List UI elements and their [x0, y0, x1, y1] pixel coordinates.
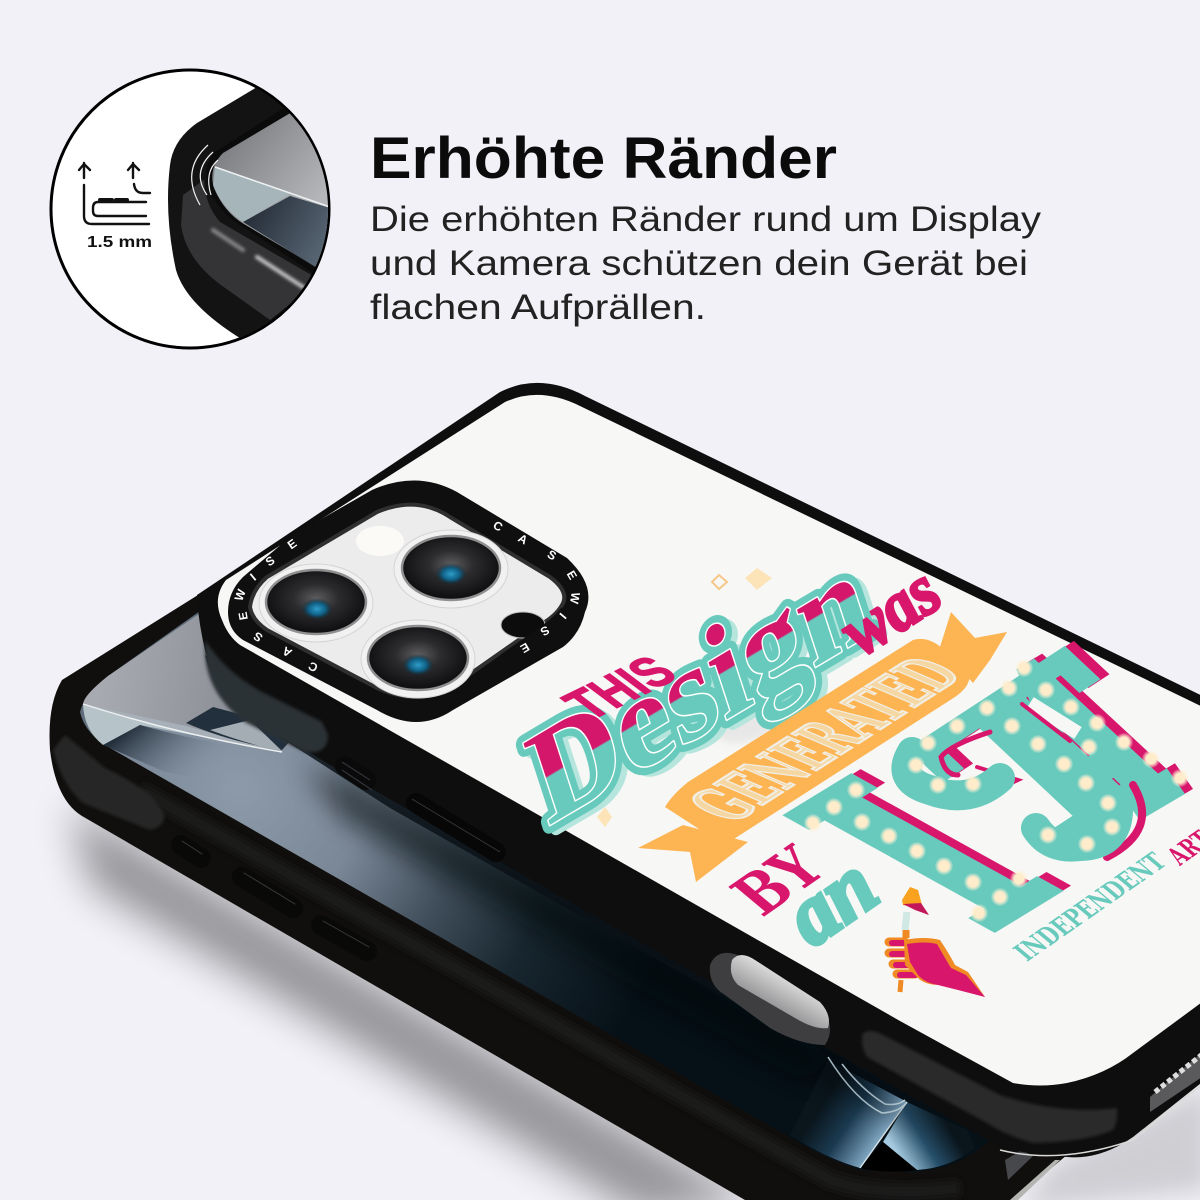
bottom corner grip pad: [862, 1031, 1117, 1143]
ring text left: I: [247, 571, 259, 584]
ring text left: [232, 536, 320, 675]
shadow under rear phone: [70, 805, 760, 1200]
THIS: THIS: [550, 647, 690, 728]
button: volume up: [244, 872, 296, 904]
I shadow and letter: I: [733, 736, 1138, 964]
panel: rear phone in bumper case: [50, 500, 1200, 1200]
BY: BY: [716, 834, 840, 928]
ring text right: E: [518, 640, 532, 656]
icon: hand with brush: [889, 887, 985, 997]
ring text right: [494, 522, 580, 654]
silver side edge: [1010, 1160, 1060, 1200]
body text: und Kamera schützen dein Gerät bei: [370, 244, 1028, 283]
camera plate: [250, 505, 564, 697]
front case bumper: [197, 383, 1200, 1157]
ring text left: W: [232, 587, 249, 603]
ring text left: S: [263, 553, 277, 569]
body text: flachen Aufprällen.: [370, 288, 706, 327]
lens 1: [259, 564, 373, 642]
rear phone bumper: [50, 596, 1065, 1200]
heading: Erhöhte Ränder: [370, 126, 837, 191]
ring text right: A: [516, 531, 530, 548]
side button long: [412, 799, 500, 852]
ring text left: C: [306, 658, 320, 675]
magnet ghost: [720, 718, 770, 742]
ring text right: E: [564, 568, 580, 582]
soft shadow of front phone: [300, 760, 950, 1140]
screen pale wedge: [83, 704, 199, 745]
banner: [638, 612, 1007, 882]
ring re-cover of sensor edge: [505, 612, 567, 660]
ring text left: E: [285, 536, 299, 552]
lens 2: [394, 530, 508, 608]
port: [1150, 1050, 1200, 1112]
Design: Design: [512, 521, 885, 853]
panel: zoom detail circle: [51, 70, 345, 348]
white phone back: [218, 395, 1200, 1085]
camera ring: [228, 480, 588, 722]
flash: [356, 526, 404, 556]
ring text right: C: [491, 518, 505, 535]
dark shadow from front phone: [323, 767, 552, 926]
GENERATED: GENERATED: [671, 648, 981, 831]
front case rim light: [1000, 1086, 1200, 1156]
icon: raised edge diagram: [79, 163, 150, 224]
sensor: [501, 612, 545, 638]
brush head: [902, 887, 928, 915]
rear buttons: [181, 841, 369, 951]
Design: Design: [512, 521, 885, 853]
ring text right: S: [545, 547, 559, 563]
translucent side of front phone: [205, 655, 574, 904]
fingers: [889, 942, 915, 974]
marquee bulbs: [804, 659, 1189, 922]
ring text left: A: [280, 643, 294, 660]
fist: [904, 938, 985, 997]
side button small: [342, 762, 372, 790]
body text: Die erhöhten Ränder rund um Display: [370, 200, 1042, 239]
marquee flourishes: [906, 703, 1142, 857]
an: an: [768, 838, 894, 964]
screen light beams: [800, 1072, 907, 1168]
was: was: [824, 552, 956, 670]
sparkles: [597, 568, 772, 827]
body text: [370, 200, 1042, 327]
Design: Design: [519, 524, 891, 856]
screen: [80, 612, 988, 1172]
panel: front phone back with case: [197, 383, 1200, 1157]
I shadow and letter: I: [724, 741, 1129, 969]
ring text left: E: [236, 611, 251, 621]
rear bumper side rail: [140, 790, 960, 1192]
button: action: [182, 840, 202, 854]
side grip pad near camera: [205, 640, 328, 752]
raised bumper close-up: [168, 88, 328, 338]
rear corner grip pad: [53, 735, 164, 830]
silver button: [710, 953, 830, 1045]
label: 1.5 mm: 1.5 mm: [87, 234, 152, 251]
ring text right: S: [538, 623, 552, 639]
ring text left: S: [251, 629, 265, 645]
brush handle: [905, 912, 907, 930]
button: volume down: [322, 920, 370, 948]
ring text right: I: [556, 610, 569, 622]
artwork: lettering: [512, 518, 1200, 997]
ring text right: W: [567, 591, 583, 605]
screen top grey area: [83, 614, 289, 748]
lens 3: [361, 620, 475, 698]
